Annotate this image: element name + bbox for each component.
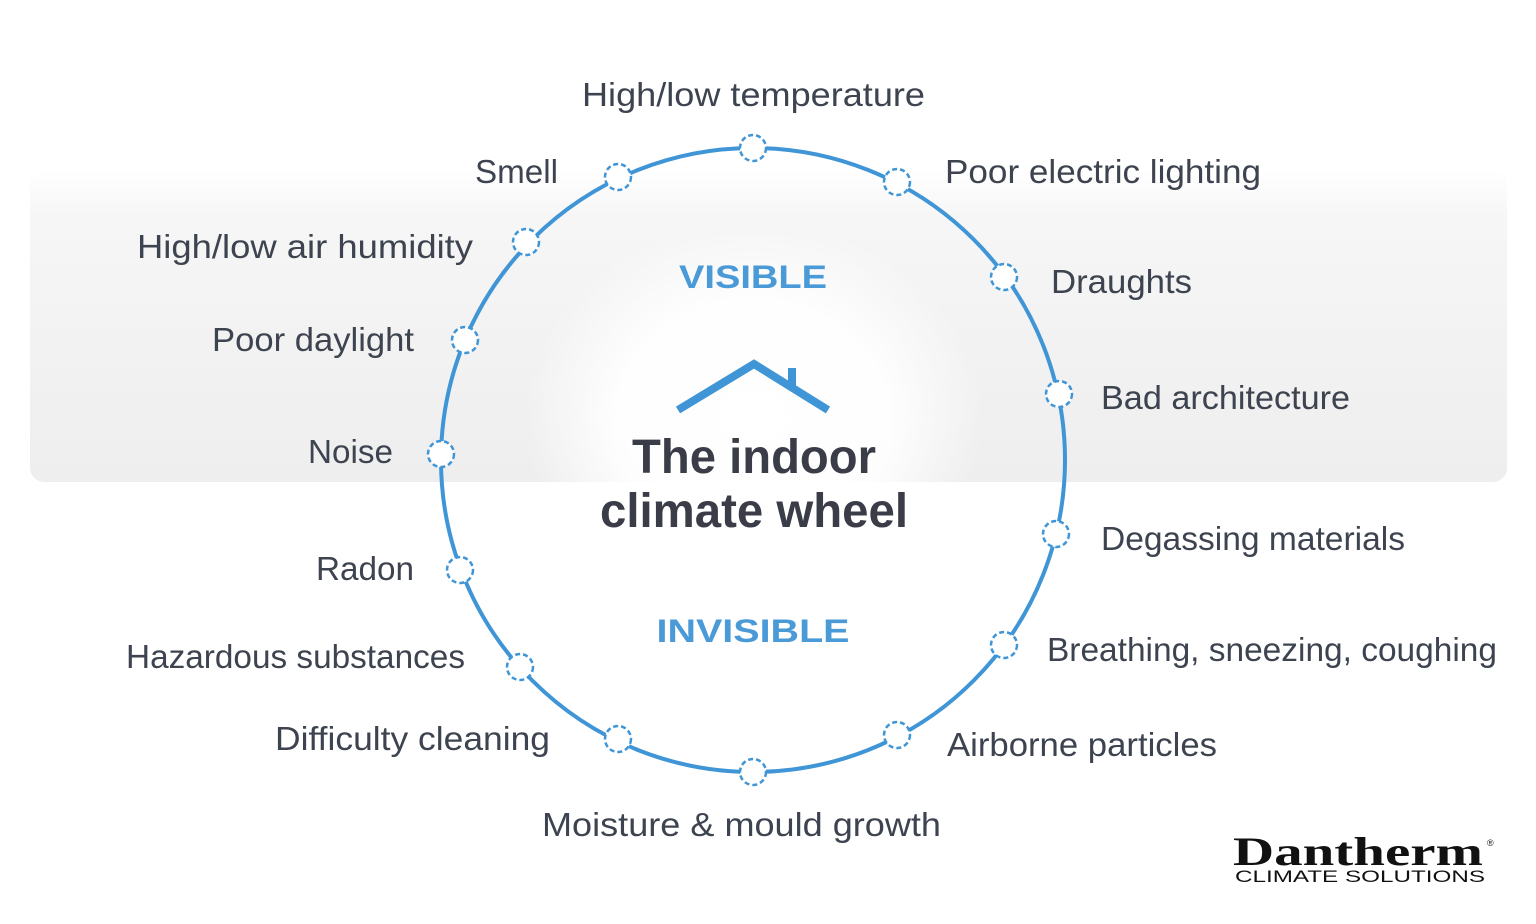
heading: invisible: INVISIBLE	[656, 613, 850, 649]
labels: Difficulty cleaning	[275, 720, 550, 757]
labels: Degassing materials	[1101, 520, 1405, 557]
labels	[126, 76, 1497, 843]
labels: Airborne particles	[947, 726, 1217, 763]
heading: visible: VISIBLE	[679, 259, 827, 295]
labels: Bad architecture	[1101, 379, 1350, 416]
title: climate wheel	[600, 485, 908, 538]
title: The indoor	[632, 431, 876, 484]
labels: High/low temperature	[582, 76, 925, 113]
title	[600, 431, 908, 538]
background band	[30, 170, 1507, 482]
center glow	[523, 220, 983, 620]
labels: Poor daylight	[212, 321, 414, 358]
labels: Breathing, sneezing, coughing	[1047, 631, 1497, 668]
logo: ®	[1487, 838, 1494, 848]
labels: Smell	[475, 153, 558, 190]
labels: Hazardous substances	[126, 638, 465, 675]
labels: Draughts	[1051, 263, 1192, 300]
logo	[1233, 829, 1494, 886]
icon: house roof	[678, 364, 828, 410]
labels: Radon	[316, 550, 414, 587]
labels: Moisture & mould growth	[542, 806, 941, 843]
wheel circle	[441, 148, 1065, 772]
wheel nodes	[428, 135, 1072, 785]
labels: High/low air humidity	[137, 228, 474, 265]
logo: CLIMATE SOLUTIONS	[1235, 867, 1485, 886]
logo: Dantherm	[1233, 829, 1483, 874]
labels: Poor electric lighting	[945, 153, 1261, 190]
labels: Noise	[308, 433, 393, 470]
